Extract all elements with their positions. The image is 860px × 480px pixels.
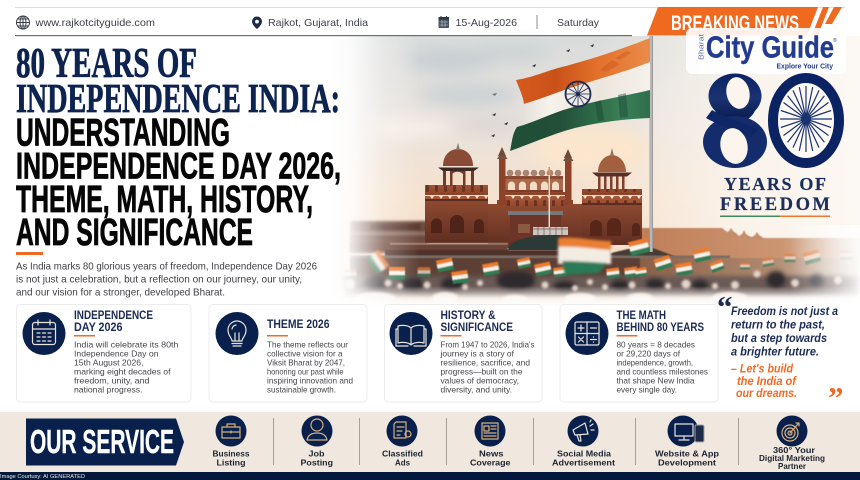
- icon: Ashoka chakra: [780, 86, 832, 152]
- weekday: Saturday: [557, 17, 600, 29]
- service: social media advertisement: Advertisement: [552, 458, 615, 468]
- service: business listing: Business: [212, 448, 250, 458]
- service: job posting: Job: [308, 448, 324, 458]
- our service label: OUR SERVICE: [30, 423, 174, 460]
- service: business listing: [212, 416, 250, 468]
- header bar: [15, 7, 845, 36]
- service: digital marketing partner: [759, 416, 825, 471]
- title: INDEPENDENCE DAY 2026,: [16, 146, 341, 186]
- title: INDEPENDENCE INDIA:: [16, 75, 340, 121]
- card: Independence Day 2026: marking eight decades of: [74, 366, 171, 376]
- intro paragraph: [16, 260, 317, 298]
- card: History and Significance: From 1947 to 2026, India's: [440, 340, 534, 350]
- badge: 80 years of freedom: FREEDOM: [720, 195, 830, 215]
- card: History and Significance: HISTORY &: [440, 310, 496, 322]
- service: news coverage: News: [479, 448, 504, 458]
- card: Theme 2026: collective vision for a: [267, 348, 343, 358]
- card: Independence Day 2026: [16, 304, 191, 402]
- card: History and Significance: values of democracy,: [440, 376, 519, 386]
- card: Theme 2026: THEME 2026: [267, 319, 330, 331]
- footer strip: [0, 472, 860, 480]
- service: classified ads: [382, 416, 423, 468]
- card: History and Significance: progress—built on the: [440, 366, 523, 376]
- card: Theme 2026: sustainable growth.: [267, 384, 336, 394]
- intro paragraph: As India marks 80 glorious years of freedom, Independence Day 2026: [16, 260, 317, 272]
- card: The Math Behind 80 Years: or 29,220 days of: [616, 348, 681, 358]
- crowd: [345, 271, 860, 296]
- fort: central pavilion: [505, 170, 563, 192]
- card: Theme 2026: [209, 304, 367, 402]
- service: news coverage: Coverage: [470, 458, 511, 468]
- location: Rajkot, Gujarat, India: [268, 17, 368, 29]
- service: digital marketing partner: 360° Your: [773, 445, 816, 455]
- date: 15-Aug-2026: [456, 17, 517, 29]
- card: The Math Behind 80 Years: independence, growth,: [616, 358, 693, 368]
- breaking news banner: BREAKING NEWS: [671, 12, 799, 35]
- card: The Math Behind 80 Years: that shape New India: [616, 376, 695, 386]
- icon: globe: [16, 16, 30, 29]
- card: The Math Behind 80 Years: BEHIND 80 YEARS: [616, 322, 704, 334]
- card: Theme 2026: The theme reflects our: [267, 340, 348, 350]
- card: Independence Day 2026: India will celebrate its 80th: [74, 340, 179, 350]
- card: Independence Day 2026: DAY 2026: [74, 322, 122, 334]
- fort: right low wall: [590, 228, 860, 262]
- card: The Math Behind 80 Years: 80 years = 8 decades: [616, 340, 695, 350]
- quote: [717, 289, 844, 415]
- logo: Bharat City Guide: Bharat: [696, 33, 706, 60]
- card: Independence Day 2026: Independence Day on: [74, 348, 159, 358]
- fort: minarets: [497, 147, 574, 205]
- card: History and Significance: diversity, and unity.: [440, 384, 512, 394]
- icon: calendar: [32, 320, 56, 344]
- service: website and app development: [655, 416, 719, 468]
- footer strip: Image Courtusy: AI GENERATED: [0, 474, 85, 480]
- fort: right tower: [582, 148, 642, 245]
- fort: left low building: [350, 221, 428, 253]
- badge: 80 years of freedom: [703, 50, 840, 217]
- card: Theme 2026: Viksit Bharat by 2047,: [267, 358, 345, 368]
- title: [16, 41, 341, 254]
- service: website and app development: Development: [658, 458, 716, 468]
- card: Theme 2026: inspiring innovation and: [267, 376, 353, 386]
- badge: 80 years of freedom: 8: [708, 50, 762, 194]
- quote: a brighter future.: [731, 346, 819, 358]
- quote: “: [717, 289, 732, 324]
- logo: Bharat City Guide: City Guide: [706, 30, 834, 64]
- quote: ”: [828, 380, 844, 415]
- icon: birds: [491, 44, 594, 137]
- quote: Freedom is not just a: [731, 306, 839, 318]
- title: UNDERSTANDING: [16, 112, 230, 154]
- quote: but a step towards: [731, 333, 827, 345]
- icon: calculator: [575, 322, 599, 345]
- intro paragraph: is not just a celebration, but a reflection on our journey, our unity,: [16, 274, 302, 286]
- card: The Math Behind 80 Years: every single day.: [616, 384, 677, 394]
- badge: 80 years of freedom: YEARS OF: [724, 174, 826, 194]
- title: 80 YEARS OF: [16, 41, 197, 87]
- large blurred flags: [367, 238, 611, 275]
- service: classified ads: Classified: [382, 448, 423, 458]
- fort: left tower: [425, 143, 488, 243]
- card: The Math Behind 80 Years: and countless milestones: [616, 366, 708, 376]
- fort: small flag pole centre: [548, 167, 550, 229]
- card: Theme 2026: honoring our past while: [267, 366, 344, 376]
- card: History and Significance: resilience, sacrifice, and: [440, 358, 530, 368]
- logo: Bharat City Guide: ®: [833, 37, 837, 44]
- service: classified ads: Ads: [395, 458, 410, 468]
- icon: location pin: [252, 16, 262, 29]
- icon: Indian flag: [510, 38, 650, 151]
- card: History and Significance: [384, 304, 542, 402]
- quote: the India of: [737, 376, 797, 388]
- logo: Bharat City Guide: Explore Your City: [776, 62, 834, 70]
- quote: our dreams.: [736, 388, 797, 400]
- hero photo: Red Fort, flag and crowd: [330, 36, 860, 307]
- small tricolour flags: [344, 238, 853, 284]
- service: news coverage: [470, 416, 511, 468]
- icon: open book: [396, 325, 426, 346]
- services band: [0, 412, 860, 472]
- card: Independence Day 2026: national progress.: [74, 384, 142, 394]
- icon: calendar: [438, 16, 449, 28]
- website: www.rajkotcityguide.com: [34, 17, 155, 29]
- fort: railing and dome: [508, 227, 568, 250]
- intro paragraph: and our vision for a stronger, developed Bharat.: [16, 286, 225, 298]
- card: The Math Behind 80 Years: [560, 304, 718, 402]
- title: AND SIGNIFICANCE: [16, 212, 253, 254]
- service: social media advertisement: Social Media: [557, 448, 611, 458]
- card: History and Significance: journey is a story of: [440, 348, 515, 358]
- service: business listing: Listing: [216, 458, 246, 468]
- card: Independence Day 2026: 15th August 2026,: [74, 358, 144, 368]
- title: THEME, MATH, HISTORY,: [16, 179, 313, 221]
- fort: terrace and ground: [350, 243, 860, 282]
- service: job posting: [300, 416, 333, 468]
- breaking news banner: [647, 7, 842, 36]
- quote: – Let's build: [731, 364, 794, 376]
- service: website and app development: Website & App: [655, 448, 719, 458]
- card: Independence Day 2026: freedom, unity, and: [74, 376, 150, 386]
- icon: light bulb: [228, 321, 246, 346]
- card: The Math Behind 80 Years: THE MATH: [616, 310, 666, 322]
- logo: Bharat City Guide: [686, 28, 846, 74]
- card: Independence Day 2026: INDEPENDENCE: [74, 310, 153, 322]
- fort: flagpole: [650, 36, 653, 252]
- service: social media advertisement: [552, 416, 615, 468]
- badge: 80 years of freedom: 0: [772, 50, 840, 194]
- fort: central wall: [488, 192, 582, 248]
- service: job posting: Posting: [300, 458, 333, 468]
- card: History and Significance: SIGNIFICANCE: [440, 322, 513, 334]
- our service label: [26, 418, 184, 466]
- fades: [330, 36, 420, 306]
- quote: return to the past,: [731, 320, 825, 332]
- service: digital marketing partner: Digital Marketing: [759, 453, 825, 463]
- service: digital marketing partner: Partner: [778, 461, 807, 471]
